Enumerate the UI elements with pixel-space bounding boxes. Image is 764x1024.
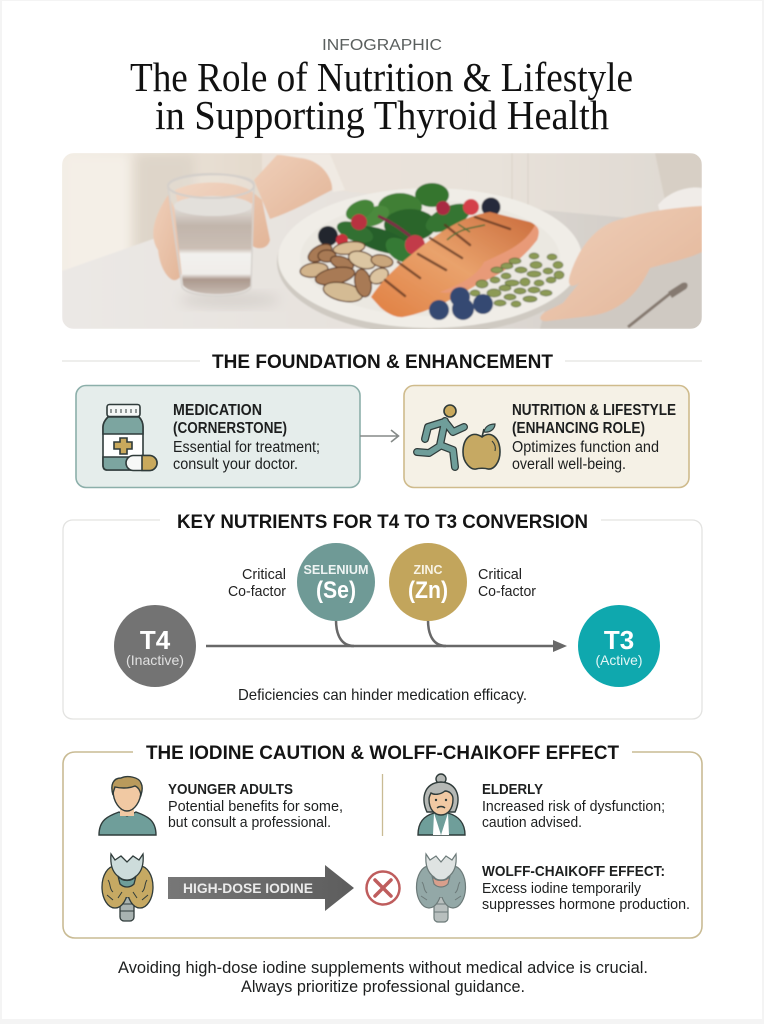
text: medication: consult your doctor.	[173, 456, 298, 473]
note: deficiencies: Deficiencies can hinder medication efficacy.	[238, 687, 527, 704]
icon: suppressed thyroid	[416, 854, 466, 922]
text: elderly: caution advised.	[482, 814, 582, 831]
text: nutrition and lifestyle: (ENHANCING ROLE)	[512, 420, 645, 437]
text: nutrition and lifestyle: NUTRITION & LIFESTYLE	[512, 402, 676, 419]
text: elderly: Increased risk of dysfunction;	[482, 798, 665, 815]
label: zinc co-factor: Critical	[478, 566, 522, 583]
text: medication: Essential for treatment;	[173, 439, 320, 456]
node: T4 inactive: (Inactive)	[126, 652, 184, 668]
node: T3 active: (Active)	[596, 652, 642, 668]
label: selenium co-factor	[228, 566, 286, 600]
text: nutrition and lifestyle	[512, 402, 676, 473]
text: Wolff-Chaikoff effect: Excess iodine temporarily	[482, 880, 641, 897]
text: medication: MEDICATION	[173, 402, 262, 419]
text: Wolff-Chaikoff effect: suppresses hormone production.	[482, 896, 690, 913]
text: younger adults: YOUNGER ADULTS	[168, 781, 293, 798]
text: Wolff-Chaikoff effect: WOLFF-CHAIKOFF EFFECT:	[482, 863, 665, 880]
icon: healthy thyroid	[102, 854, 153, 921]
text: nutrition and lifestyle: Optimizes function and	[512, 439, 659, 456]
arrow: medication to nutrition	[360, 430, 398, 442]
heading: iodine caution: THE IODINE CAUTION & WOLFF-CHAIKOFF EFFECT	[146, 743, 619, 764]
title: The Role of Nutrition & Lifestyle	[130, 54, 633, 100]
panel: iodine caution and Wolff-Chaikoff effect	[63, 743, 702, 938]
icon: pill bottle	[103, 404, 157, 470]
arrow: high-dose iodine	[168, 865, 354, 911]
title: in Supporting Thyroid Health	[155, 92, 609, 138]
conversion arrow	[206, 620, 567, 652]
footer note	[118, 959, 648, 996]
panel: medication	[76, 386, 360, 488]
icon: elderly person	[418, 774, 465, 835]
arrow: high-dose iodine: HIGH-DOSE IODINE	[183, 880, 313, 896]
icon: blocked	[366, 872, 400, 904]
text: medication: (CORNERSTONE)	[173, 420, 287, 437]
node: selenium	[297, 543, 375, 621]
node: selenium: (Se)	[316, 577, 356, 604]
label: selenium co-factor: Critical	[242, 566, 286, 583]
node: zinc: (Zn)	[408, 577, 448, 604]
heading: key nutrients: KEY NUTRIENTS FOR T4 TO T3 CONVERSION	[177, 512, 588, 533]
label: zinc co-factor: Co-factor	[478, 583, 536, 600]
node: T3 active: T3	[604, 625, 634, 655]
icon: runner and apple	[417, 405, 500, 469]
text: nutrition and lifestyle: overall well-being.	[512, 456, 626, 473]
node: selenium: SELENIUM	[304, 563, 368, 577]
node: zinc: ZINC	[414, 563, 442, 577]
text: younger adults	[168, 781, 343, 831]
text: elderly	[482, 781, 665, 831]
node: T4 inactive: T4	[140, 625, 171, 655]
text: medication	[173, 402, 320, 473]
title	[130, 54, 633, 138]
text: younger adults: but consult a professional.	[168, 814, 331, 831]
text: elderly: ELDERLY	[482, 781, 543, 798]
text: Wolff-Chaikoff effect	[482, 863, 690, 913]
footer note: Avoiding high-dose iodine supplements without medical advice is crucial.	[118, 959, 648, 977]
panel: nutrition and lifestyle	[404, 386, 689, 488]
footer note: Always prioritize professional guidance.	[241, 978, 525, 996]
hero photo: water glass and plate of salmon, nuts and seeds	[62, 153, 702, 335]
panel: key nutrients for T4 to T3 conversion	[63, 512, 702, 719]
label: selenium co-factor: Co-factor	[228, 583, 286, 600]
node: T3 active	[578, 605, 660, 687]
icon: younger adult	[99, 777, 156, 835]
eyebrow label: INFOGRAPHIC	[322, 37, 442, 54]
node: T4 inactive	[114, 605, 196, 687]
label: zinc co-factor	[478, 566, 536, 600]
node: zinc	[389, 543, 467, 621]
text: younger adults: Potential benefits for some,	[168, 798, 343, 815]
section heading: foundation and enhancement: THE FOUNDATION & ENHANCEMENT	[212, 352, 553, 373]
